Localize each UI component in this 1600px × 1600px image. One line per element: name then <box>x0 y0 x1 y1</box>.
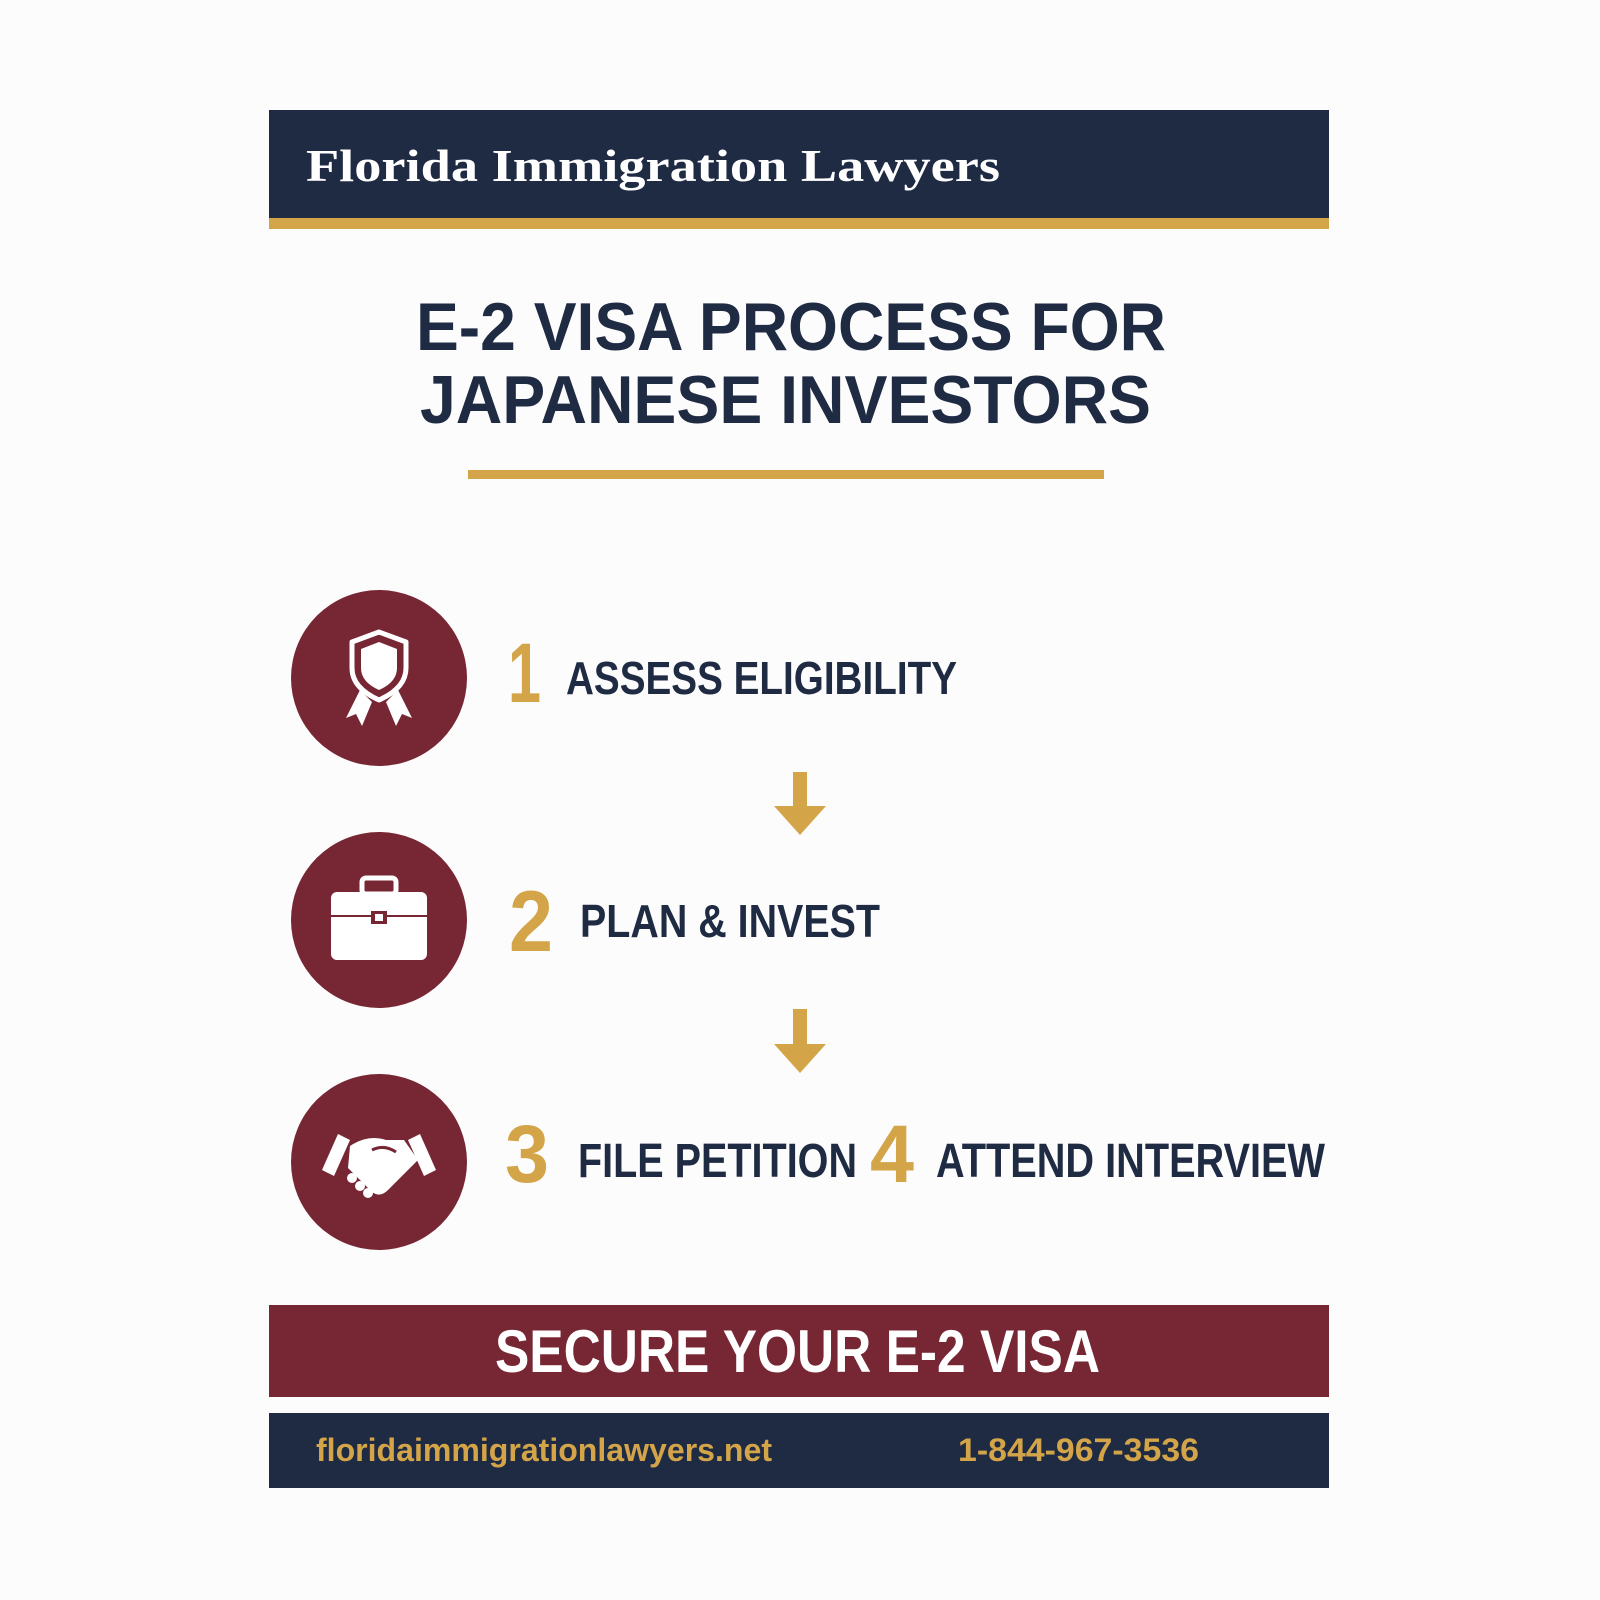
icon: briefcase <box>331 878 427 960</box>
header title: Florida Immigration Lawyers <box>306 140 1000 191</box>
step 3 and 4 <box>291 1074 1326 1250</box>
cta bar: SECURE YOUR E-2 VISA <box>495 1318 1100 1385</box>
icon: shield badge <box>346 632 412 726</box>
label 4: ATTEND INTERVIEW <box>936 1135 1326 1188</box>
number 4: 4 <box>870 1109 914 1200</box>
label 3: FILE PETITION <box>578 1135 857 1188</box>
arrow 1 <box>774 772 826 835</box>
website: floridaimmigrationlawyers.net <box>316 1432 772 1468</box>
main title: JAPANESE INVESTORS <box>420 362 1151 438</box>
number 2: 2 <box>509 874 553 970</box>
icon: handshake <box>322 1134 436 1198</box>
title underline <box>468 470 1104 479</box>
phone: 1-844-967-3536 <box>958 1432 1199 1468</box>
arrow 2 <box>774 1009 826 1073</box>
number 1: 1 <box>508 626 541 720</box>
step 2 <box>291 832 880 1008</box>
main title: E-2 VISA PROCESS FOR <box>416 289 1166 365</box>
label 2: PLAN & INVEST <box>580 895 880 947</box>
main title <box>416 289 1166 438</box>
contact bar <box>269 1413 1329 1488</box>
header bar <box>269 110 1329 229</box>
label 1: ASSESS ELIGIBILITY <box>566 652 957 704</box>
step 1 <box>291 590 957 766</box>
cta bar <box>269 1305 1329 1397</box>
number 3: 3 <box>505 1109 549 1200</box>
